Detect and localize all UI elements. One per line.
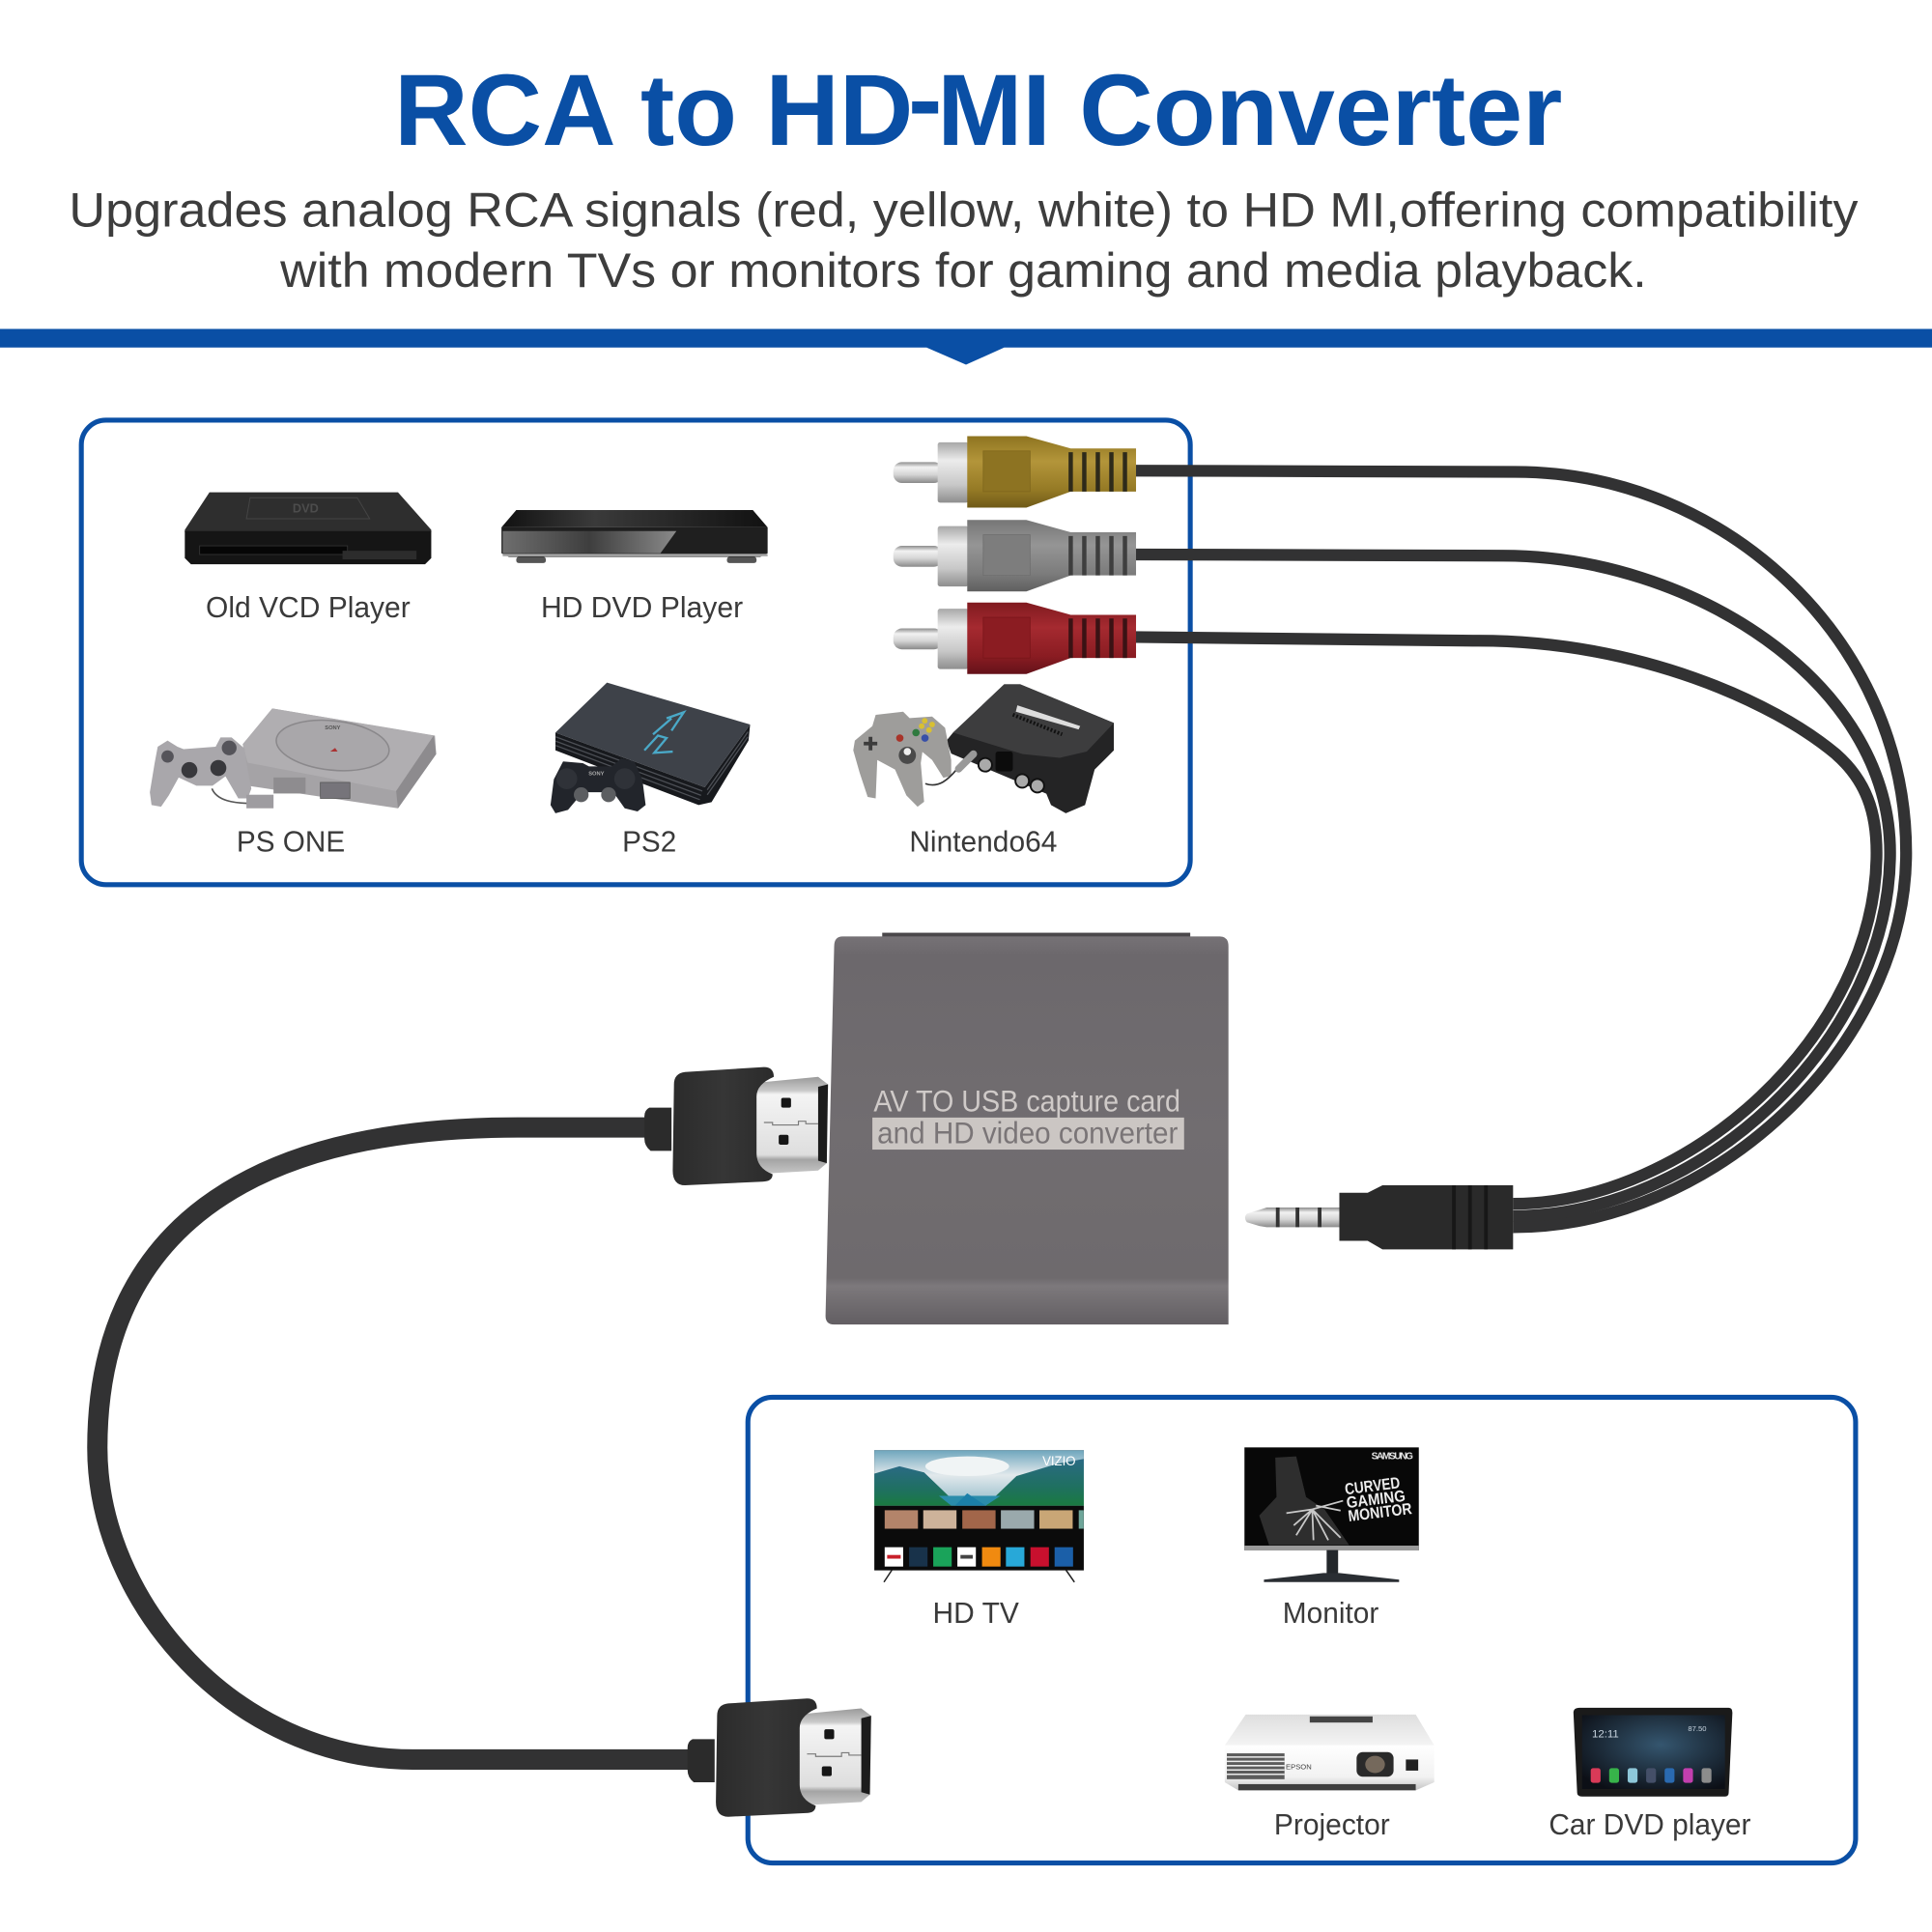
icon: HD TV [874,1450,1084,1582]
red RCA plug [894,603,1136,674]
subtitle [69,183,1859,298]
device print: second line: and HD video converter [877,1116,1179,1151]
label: Projector: Projector [1274,1808,1390,1841]
bottom HDMI plug [688,1698,871,1817]
icon: old VCD player [185,493,431,564]
icon: PS ONE console [150,708,437,809]
icon: HD DVD player [501,510,768,563]
header divider band with pointer [0,329,1932,365]
icon: car DVD player: 12:11 [1592,1728,1619,1740]
title: Converter [1079,54,1556,167]
subtitle: with modern TVs or monitors for gaming and media playback. [279,242,1647,298]
icon: HD TV: VIZIO [1042,1453,1076,1468]
device print: label strip [872,1118,1184,1150]
icon: old VCD player: DVD [293,501,319,516]
icon: PS2 console [551,683,751,813]
HDMI cable [98,1127,696,1759]
yellow RCA plug [894,437,1136,508]
icon: monitor: MONITOR [1347,1499,1413,1525]
label: Old VCD Player: Old VCD Player [206,591,411,624]
icon: projector: EPSON [1286,1763,1312,1772]
label: Nintendo64: Nintendo64 [909,825,1057,858]
converter box [826,933,1229,1324]
label: PS2: PS2 [622,825,676,858]
device print: first line: AV TO USB capture card [873,1084,1180,1119]
icon: car DVD player [1574,1708,1732,1797]
panel: output devices [748,1397,1856,1863]
title: - [908,43,942,156]
title: MI [937,54,1051,167]
label: Car DVD player: Car DVD player [1548,1808,1751,1841]
label: Monitor: Monitor [1283,1597,1378,1630]
icon: projector [1225,1715,1435,1790]
icon: monitor: SAMSUNG [1372,1452,1413,1463]
RCA and audio cable bundle [1133,470,1906,1227]
panel: source devices [81,420,1190,885]
grey RCA plug [894,520,1136,591]
icon: monitor: CURVED [1344,1473,1401,1498]
icon: monitor: GAMING [1346,1487,1406,1512]
subtitle: Upgrades analog RCA signals (red, yellow, white) to HD MI,offering compatibility [69,183,1859,238]
title: RCA to HD [394,54,907,167]
icon: car DVD player: 87.50 [1688,1724,1707,1733]
label: HD DVD Player: HD DVD Player [541,591,743,624]
icon: PS ONE console: SONY [325,725,341,731]
label: PS ONE: PS ONE [237,825,345,858]
icon: monitor [1244,1447,1419,1582]
icon: PS2 console: SONY [588,771,605,777]
audio jack plug [1245,1185,1513,1249]
icon: Nintendo64 console [853,684,1114,813]
label: HD TV: HD TV [933,1597,1019,1630]
top HDMI plug [644,1067,828,1185]
